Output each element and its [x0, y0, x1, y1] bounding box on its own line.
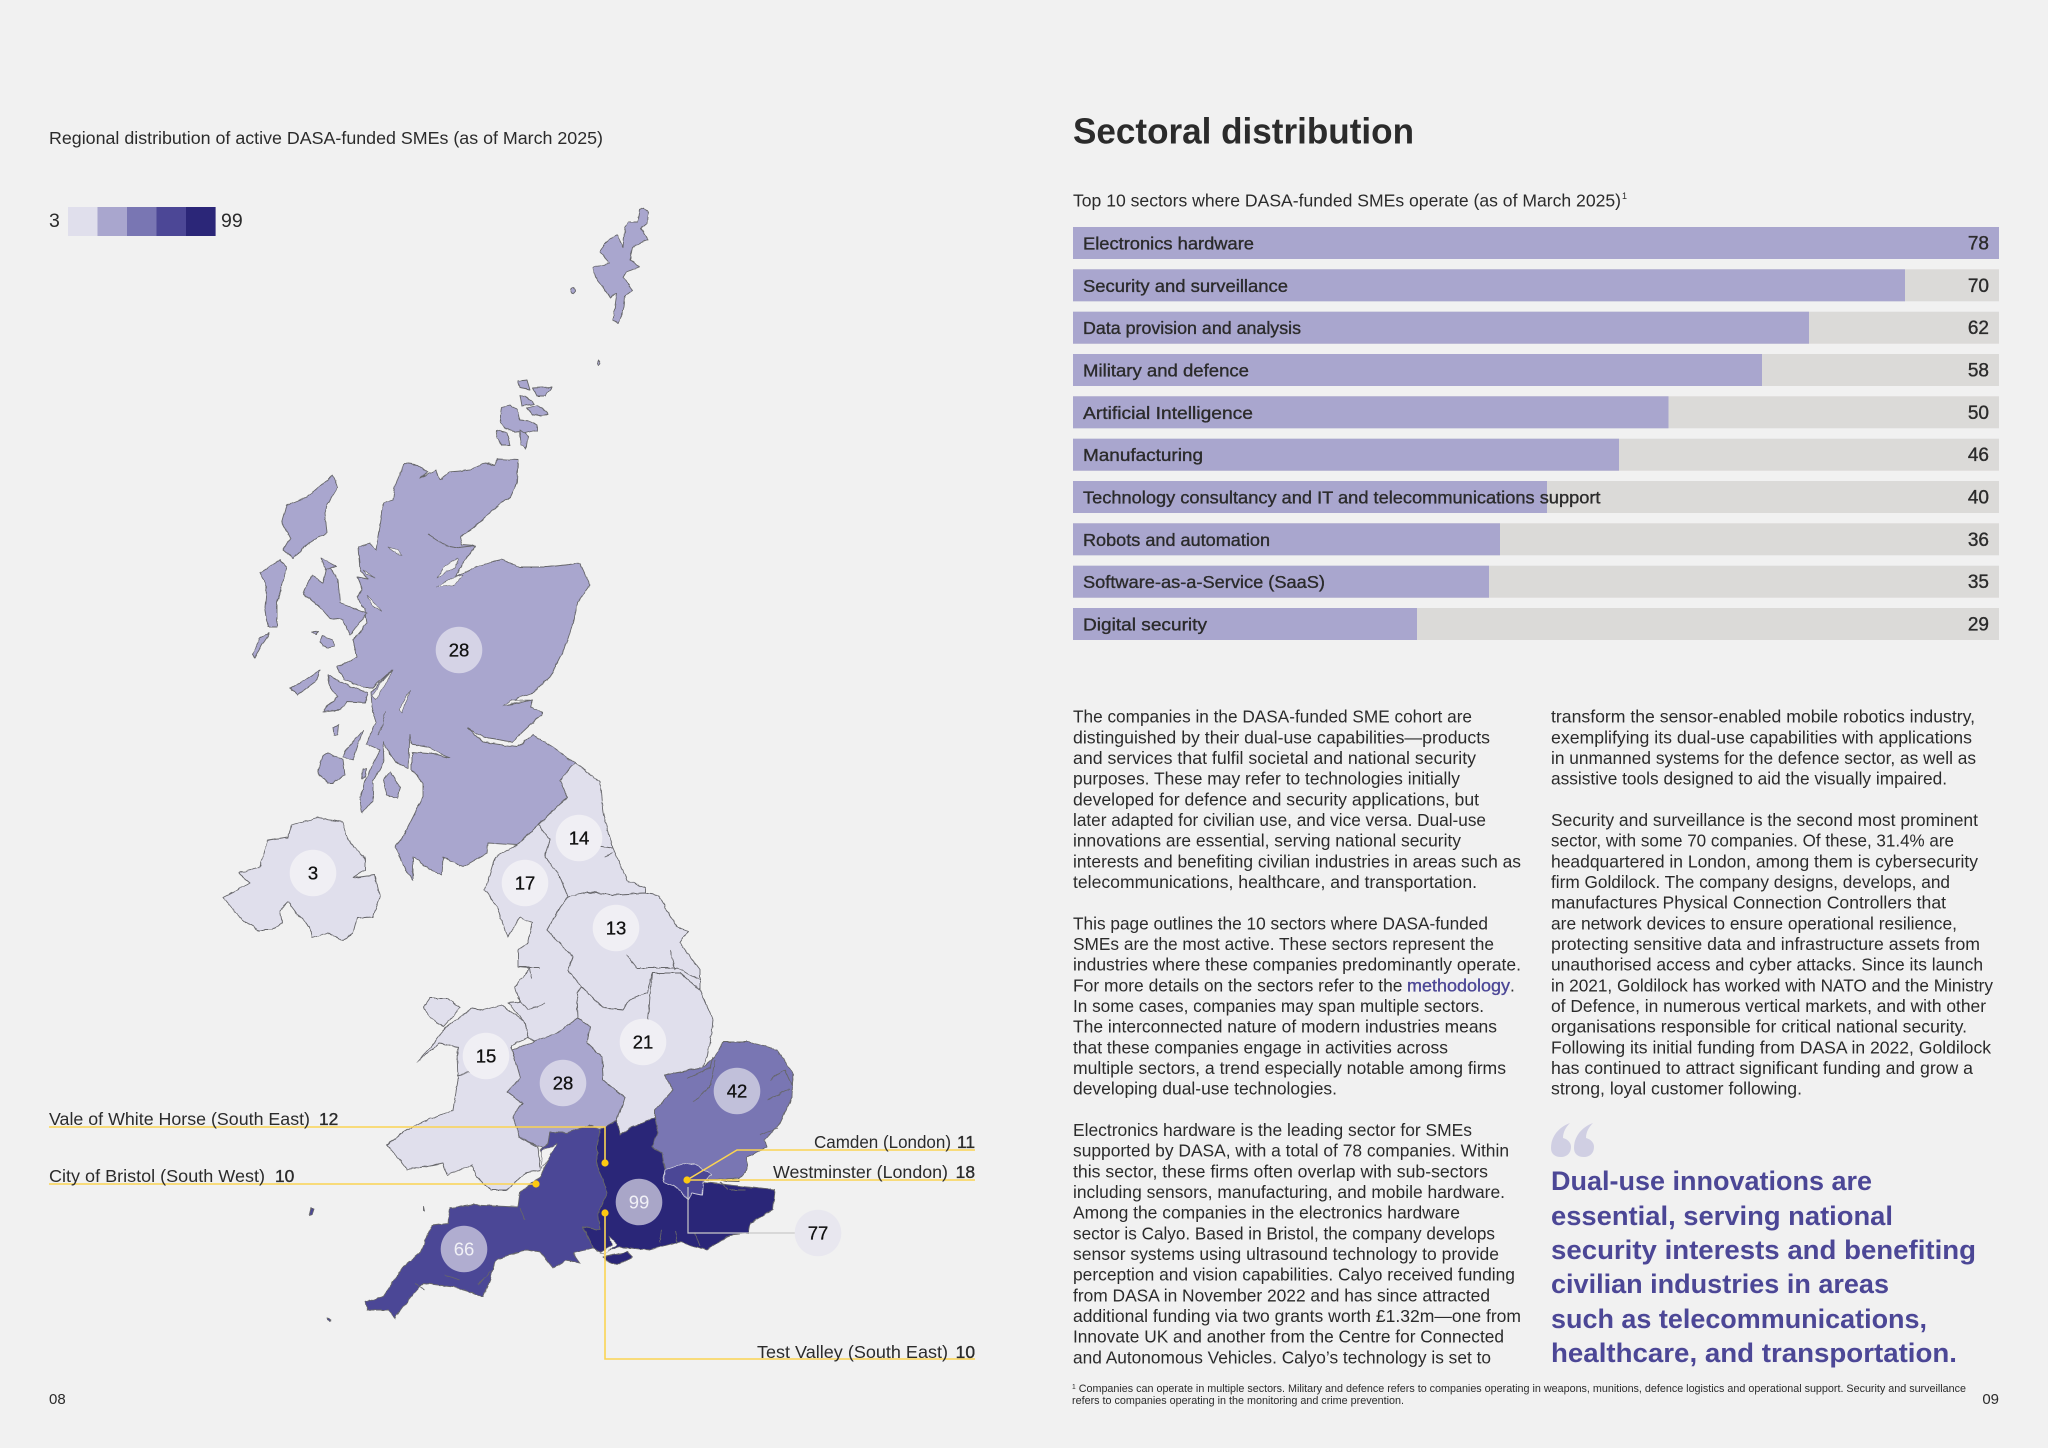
- region value bubbles: 66: [454, 1238, 474, 1260]
- body text column 1: interests and benefiting civilian industries in areas such as: [1073, 851, 1521, 871]
- bar: digital security: [1073, 608, 1999, 640]
- callout labels: 11: [957, 1132, 975, 1152]
- body text column 1: sensor systems using ultrasound technology to provide: [1073, 1244, 1499, 1264]
- bar: electronics hardware: [1073, 227, 1999, 259]
- region value bubbles: 21: [633, 1032, 653, 1052]
- pull quote: civilian industries in areas: [1551, 1269, 1889, 1299]
- body text column 1: developing dual-use technologies.: [1073, 1079, 1337, 1099]
- region value bubbles: 28: [449, 640, 469, 660]
- bar: technology consultancy: 40: [1968, 488, 1989, 508]
- callout labels: Westminster (London): [773, 1162, 948, 1182]
- icon: quotation mark: [1551, 1123, 1594, 1157]
- body text column 1: that these companies engage in activities across: [1073, 1037, 1448, 1057]
- body text column 1: developed for defence and security applications, but: [1073, 789, 1479, 809]
- map legend: [49, 207, 243, 236]
- region value bubbles: [290, 627, 841, 1272]
- South East England region: [583, 1117, 775, 1265]
- body text column 1: additional funding via two grants worth £1.32m—one from: [1073, 1306, 1521, 1326]
- body text column 2: has continued to attract significant funding and grow a: [1551, 1058, 1973, 1078]
- bar: security and surveillance: Security and surveillance: [1083, 276, 1288, 296]
- pull quote: essential, serving national: [1551, 1201, 1893, 1231]
- region value bubbles: 99: [629, 1192, 649, 1212]
- region value bubbles: 15: [476, 1046, 496, 1066]
- Wales region: [387, 998, 540, 1190]
- bar: manufacturing: [1073, 439, 1999, 471]
- bar: software as a service: Software-as-a-Service (SaaS): [1083, 572, 1325, 592]
- body text column 1: sector is Calyo. Based in Bristol, the company develops: [1073, 1223, 1495, 1243]
- left panel heading: Regional distribution of active DASA-funded SMEs (as of March 2025): [49, 128, 603, 148]
- body text column 1: The interconnected nature of modern industries means: [1073, 1017, 1497, 1037]
- bar: artificial intelligence: 50: [1968, 403, 1989, 424]
- body text column 2: [1551, 707, 1993, 1099]
- body text column 1: Among the companies in the electronics hardware: [1073, 1203, 1460, 1223]
- Yorkshire and the Humber region: [547, 892, 700, 1010]
- callout labels: Camden (London): [814, 1132, 951, 1152]
- bar: artificial intelligence: Artificial Intelligence: [1083, 403, 1253, 423]
- body text column 1: This page outlines the 10 sectors where DASA-funded: [1073, 913, 1488, 933]
- bar: digital security: Digital security: [1083, 614, 1207, 634]
- pull quote: security interests and benefiting: [1551, 1235, 1976, 1265]
- region value bubbles: 13: [606, 918, 626, 938]
- callout labels: City of Bristol (South West): [49, 1166, 265, 1186]
- bar: data provision and analysis: Data provision and analysis: [1083, 318, 1301, 338]
- bar chart: [1073, 227, 1999, 640]
- body text column 2: protecting sensitive data and infrastructure assets from: [1551, 934, 1980, 954]
- body text column 2: assistive tools designed to aid the visually impaired.: [1551, 769, 1947, 789]
- body text column 1: methodology: [1407, 975, 1510, 995]
- body text column 1: The companies in the DASA-funded SME cohort are: [1073, 707, 1472, 727]
- body text column 1: and services that fulfil societal and national security: [1073, 748, 1476, 768]
- bar: artificial intelligence: [1073, 396, 1999, 428]
- title: Sectoral distribution: [1073, 110, 1414, 152]
- body text column 1: industries where these companies predominantly operate.: [1073, 955, 1521, 975]
- region value bubbles: 14: [569, 828, 589, 848]
- pull quote: healthcare, and transportation.: [1551, 1338, 1957, 1368]
- body text column 1: including sensors, manufacturing, and mobile hardware.: [1073, 1182, 1505, 1202]
- callout lines and dots: [49, 1127, 975, 1359]
- body text column 2: organisations responsible for critical national security.: [1551, 1017, 1967, 1037]
- bar: manufacturing: Manufacturing: [1083, 445, 1203, 465]
- body text column 1: purposes. These may refer to technologies initially: [1073, 769, 1460, 789]
- bar: data provision and analysis: [1073, 312, 1999, 344]
- East of England region: [652, 1042, 793, 1180]
- footnote marker: 1: [1622, 191, 1627, 201]
- callout labels: Vale of White Horse (South East): [49, 1109, 310, 1129]
- bar: technology consultancy: [1073, 481, 1999, 513]
- coastal inlets and rivers: [363, 534, 792, 1290]
- page number right: 09: [1982, 1391, 1999, 1408]
- body text column 2: of Defence, in numerous vertical markets, and with other: [1551, 996, 1986, 1016]
- bar: military and defence: 58: [1968, 360, 1989, 382]
- callout labels: 12: [319, 1109, 338, 1129]
- East Midlands region: [577, 973, 713, 1135]
- pull quote: such as telecommunications,: [1551, 1304, 1927, 1334]
- body text column 1: innovations are essential, serving national security: [1073, 831, 1461, 851]
- region value bubbles: 77: [808, 1222, 828, 1244]
- bar: military and defence: [1073, 354, 1999, 386]
- callout labels: 10: [275, 1166, 294, 1186]
- footnote: 1: [1072, 1384, 1076, 1391]
- body text column 2: manufactures Physical Connection Controllers that: [1551, 893, 1946, 913]
- South West England region: [309, 1125, 607, 1321]
- body text column 2: in 2021, Goldilock has worked with NATO and the Ministry: [1551, 975, 1993, 995]
- body text column 1: Innovate UK and another from the Centre for Connected: [1073, 1327, 1504, 1347]
- pull quote: Dual-use innovations are: [1551, 1166, 1872, 1196]
- body text column 2: strong, loyal customer following.: [1551, 1079, 1802, 1099]
- bar: military and defence: Military and defence: [1083, 360, 1249, 380]
- bar: software as a service: 35: [1968, 572, 1989, 593]
- body text column 1: from DASA in November 2022 and has since attracted: [1073, 1285, 1490, 1305]
- body text column 1: supported by DASA, with a total of 78 companies. Within: [1073, 1141, 1509, 1161]
- body text column 2: exemplifying its dual-use capabilities with applications: [1551, 727, 1972, 747]
- bar: security and surveillance: [1073, 269, 1999, 301]
- North West England region: [485, 825, 582, 1042]
- bar: digital security: 29: [1968, 614, 1989, 636]
- Northern Ireland region: [223, 818, 380, 940]
- body text column 2: unauthorised access and cyber attacks. Since its launch: [1551, 955, 1983, 975]
- body text column 2: Following its initial funding from DASA in 2022, Goldilock: [1551, 1037, 1991, 1057]
- bar: robots and automation: 36: [1968, 530, 1989, 551]
- body text column 1: .: [1510, 975, 1515, 995]
- region value bubbles: 17: [515, 872, 535, 894]
- page number left: 08: [49, 1391, 66, 1408]
- body text column 1: and Autonomous Vehicles. Calyo’s technology is set to: [1073, 1347, 1491, 1367]
- body text column 1: Electronics hardware is the leading sector for SMEs: [1073, 1120, 1472, 1140]
- body text column 1: multiple sectors, a trend especially notable among firms: [1073, 1058, 1506, 1078]
- body text column 2: are network devices to ensure operational resilience,: [1551, 913, 1957, 933]
- body text column 2: transform the sensor-enabled mobile robotics industry,: [1551, 707, 1975, 727]
- North East England region: [538, 763, 645, 897]
- body text column 2: sector, with some 70 companies. Of these, 31.4% are: [1551, 831, 1954, 851]
- body text column 1: distinguished by their dual-use capabilities—products: [1073, 727, 1490, 747]
- London region: [663, 1163, 712, 1200]
- pull quote: [1551, 1166, 1976, 1368]
- body text column 1: telecommunications, healthcare, and transportation.: [1073, 872, 1477, 892]
- callout labels: [49, 1109, 975, 1362]
- bar: electronics hardware: Electronics hardware: [1083, 234, 1254, 254]
- body text column 1: For more details on the sectors refer to the: [1073, 975, 1402, 995]
- footnote: refers to companies operating in the monitoring and crime prevention.: [1072, 1395, 1404, 1407]
- body text column 2: firm Goldilock. The company designs, develops, and: [1551, 872, 1950, 892]
- bar: robots and automation: Robots and automation: [1083, 530, 1270, 550]
- region value bubbles: 3: [308, 862, 318, 884]
- callout labels: 18: [956, 1162, 975, 1182]
- body text column 2: headquartered in London, among them is cybersecurity: [1551, 851, 1978, 871]
- body text column 1: [1073, 707, 1521, 1367]
- callout labels: Test Valley (South East): [757, 1342, 948, 1362]
- bar: data provision and analysis: 62: [1968, 318, 1989, 339]
- body text column 2: Security and surveillance is the second most prominent: [1551, 810, 1978, 830]
- bar: manufacturing: 46: [1968, 445, 1989, 466]
- bar: robots and automation: [1073, 523, 1999, 555]
- body text column 1: perception and vision capabilities. Calyo received funding: [1073, 1265, 1515, 1285]
- chart subtitle: Top 10 sectors where DASA-funded SMEs operate (as of March 2025): [1073, 190, 1621, 210]
- body text column 1: later adapted for civilian use, and vice versa. Dual-use: [1073, 810, 1486, 830]
- map legend: 99: [221, 210, 243, 232]
- body text column 1: In some cases, companies may span multiple sectors.: [1073, 996, 1484, 1016]
- region value bubbles: 42: [727, 1080, 747, 1102]
- Scotland region with islands: [253, 208, 648, 880]
- callout labels: 10: [956, 1342, 975, 1362]
- body text column 1: this sector, these firms often overlap with sub-sectors: [1073, 1161, 1488, 1181]
- map legend: 3: [49, 210, 60, 232]
- bar: security and surveillance: 70: [1968, 276, 1989, 297]
- West Midlands region: [507, 1018, 625, 1148]
- body text column 2: in unmanned systems for the defence sector, as well as: [1551, 748, 1976, 768]
- footnote: Companies can operate in multiple sectors. Military and defence refers to companies operating in weapons, munitions, defence logistics and operational support. Security and surveillance: [1076, 1383, 1966, 1395]
- footnote: [1072, 1383, 1966, 1407]
- bar: electronics hardware: 78: [1968, 234, 1989, 254]
- bar: software as a service: [1073, 566, 1999, 598]
- bar: technology consultancy: Technology consultancy and IT and telecommunications support: [1083, 488, 1601, 508]
- region value bubbles: 28: [553, 1072, 573, 1094]
- UK map: [223, 208, 793, 1321]
- body text column 1: SMEs are the most active. These sectors represent the: [1073, 934, 1494, 954]
